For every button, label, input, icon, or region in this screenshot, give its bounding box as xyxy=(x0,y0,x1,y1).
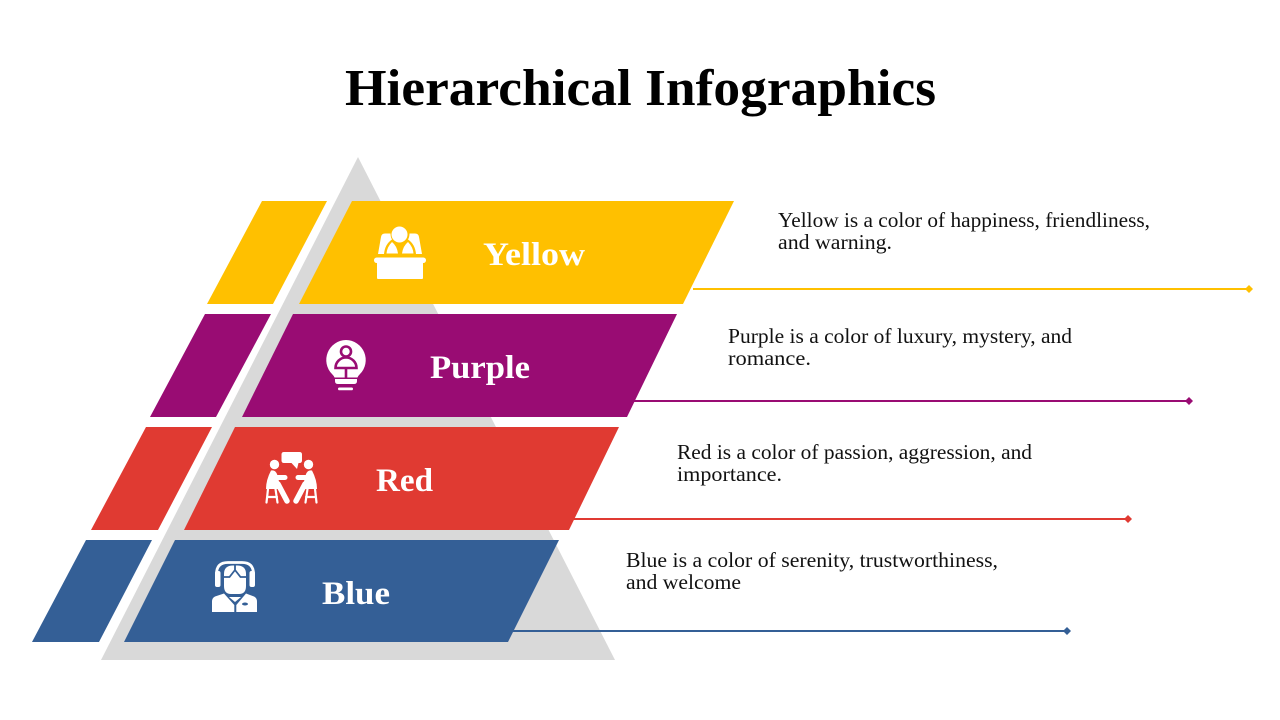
description: blue: and welcome xyxy=(626,570,741,594)
description: yellow: and warning. xyxy=(778,230,892,254)
tier: red xyxy=(91,427,619,530)
connector: red xyxy=(573,515,1132,523)
description: blue: Blue is a color of serenity, trustworthiness, xyxy=(626,548,998,572)
icon: lightbulb with person xyxy=(326,340,366,390)
description: purple: romance. xyxy=(728,346,811,370)
connector: purple xyxy=(634,397,1193,405)
connector: blue xyxy=(513,627,1071,635)
label: purple: Purple xyxy=(430,350,530,386)
tier: purple xyxy=(150,314,677,417)
description: red: importance. xyxy=(677,462,782,486)
description: red: Red is a color of passion, aggression, and xyxy=(677,440,1033,464)
label: yellow: Yellow xyxy=(483,237,585,273)
tier: blue xyxy=(32,540,559,642)
icon: two people talking xyxy=(266,452,317,502)
label: blue: Blue xyxy=(322,576,390,612)
description: purple: Purple is a color of luxury, mystery, and xyxy=(728,324,1073,348)
description: blue xyxy=(626,548,998,594)
connector: yellow xyxy=(693,285,1253,293)
icon: person with headset xyxy=(212,562,257,612)
description: yellow: Yellow is a color of happiness, friendliness, xyxy=(778,208,1150,232)
description: yellow xyxy=(778,208,1150,254)
label: red: Red xyxy=(376,463,433,499)
icon: speaker at podium xyxy=(374,226,426,279)
description: red xyxy=(677,440,1033,486)
background triangle xyxy=(101,157,615,660)
tier: yellow xyxy=(207,201,734,304)
description: purple xyxy=(728,324,1073,370)
title: Hierarchical Infographics xyxy=(345,60,936,117)
